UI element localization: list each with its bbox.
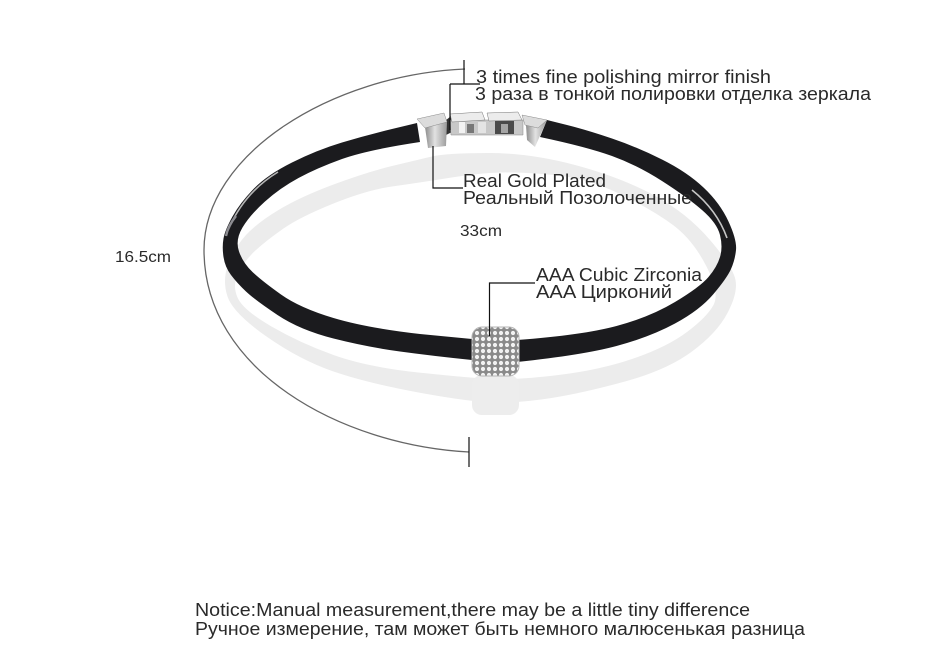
label: gold plated — [463, 170, 692, 208]
notice: Ручное измерение, там может быть немного малюсенькая разница — [195, 618, 806, 639]
choker band right — [517, 120, 736, 362]
label: zirconia: AAA Cubic Zirconia — [536, 264, 703, 285]
label: polishing: 3 times fine polishing mirror finish — [476, 66, 771, 87]
label: diameter: 16.5cm — [115, 249, 171, 266]
clasp — [417, 112, 547, 148]
callout lines — [433, 60, 535, 467]
notice: Notice:Manual measurement,there may be a little tiny difference — [195, 599, 750, 620]
label: gold plated: Реальный Позолоченные — [463, 187, 692, 208]
choker reflection — [225, 153, 736, 415]
label: zirconia — [536, 264, 703, 302]
label: width: 33cm — [460, 223, 502, 240]
label: gold plated: Real Gold Plated — [463, 170, 606, 191]
notice — [195, 599, 806, 639]
circumference arc — [204, 69, 469, 452]
zirconia bead — [472, 327, 519, 376]
label: zirconia: AAA Цирконий — [536, 281, 672, 302]
label: polishing: 3 раза в тонкой полировки отделка зеркала — [475, 83, 872, 104]
choker band left — [223, 123, 472, 360]
label: polishing — [475, 66, 872, 104]
